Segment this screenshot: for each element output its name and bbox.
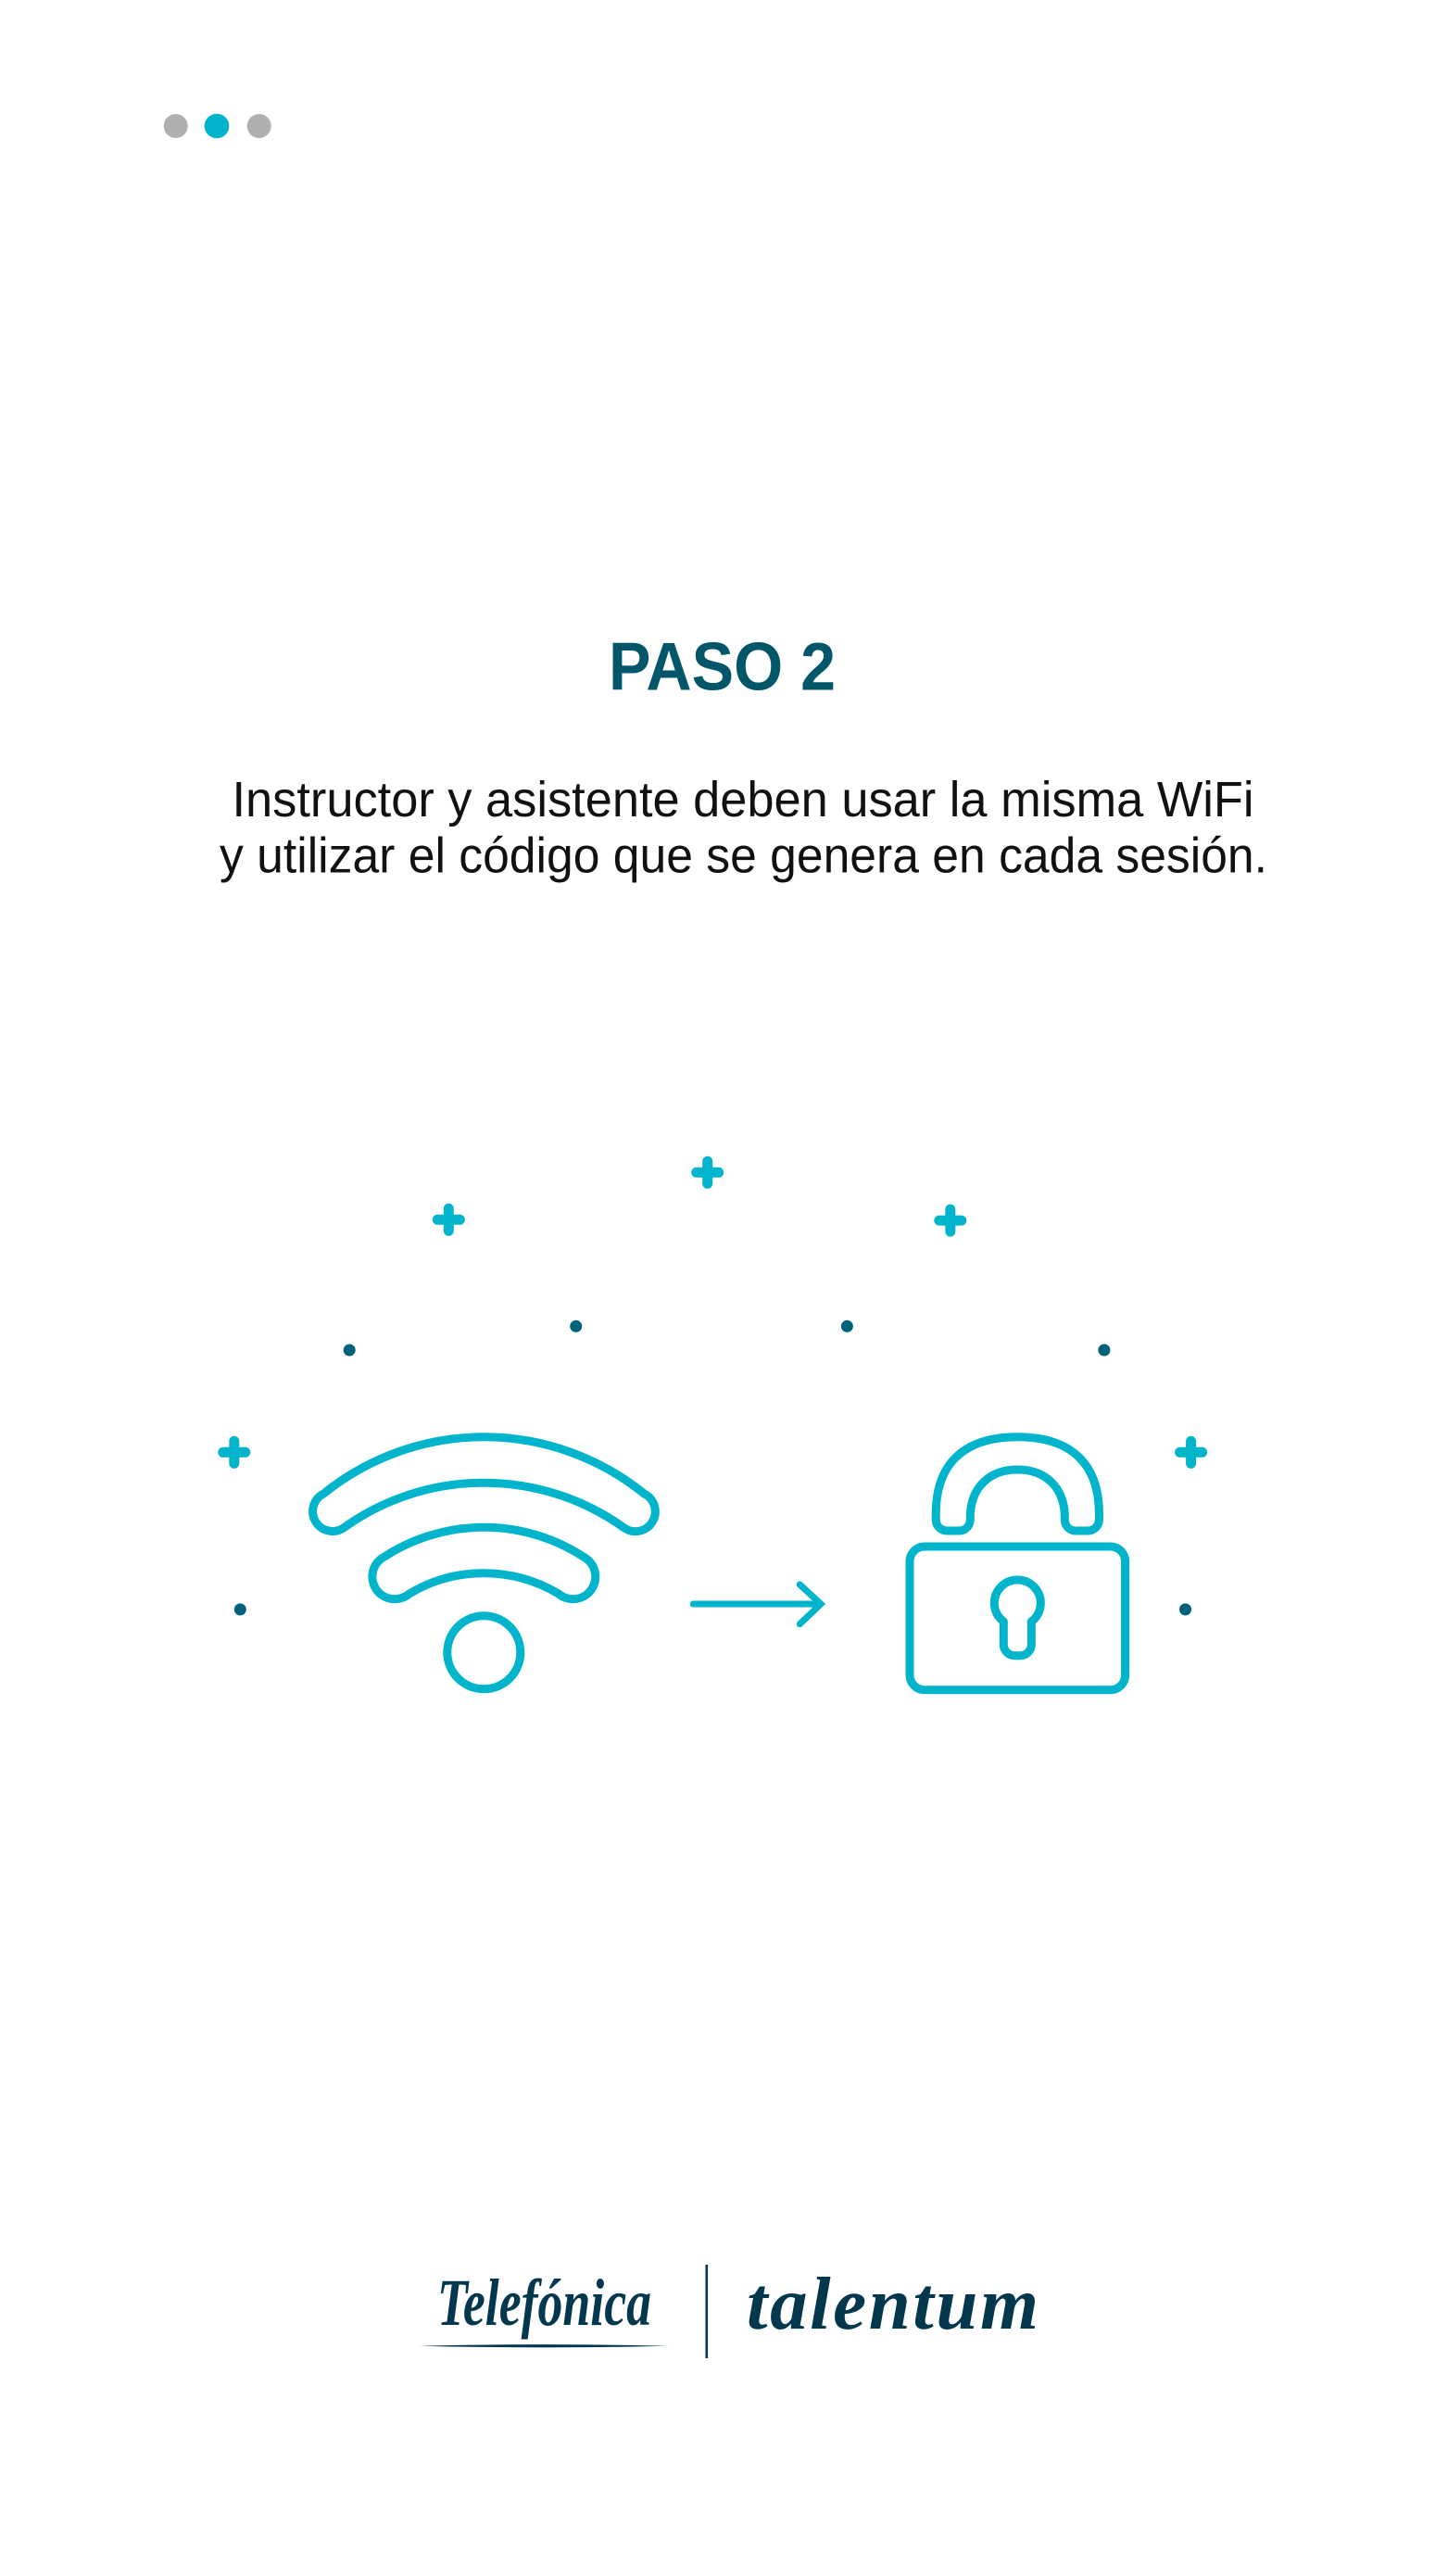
instruction text: Instructor y asistente deben usar la misma WiFi (232, 773, 1254, 827)
step progress indicator dots (164, 114, 271, 138)
title: PASO 2 (609, 628, 836, 704)
decorative plus signs (223, 1161, 1202, 1463)
logo: Telefónica: Telefónica (437, 2266, 651, 2340)
instruction text (220, 773, 1267, 884)
icon: wifi (313, 1437, 655, 1689)
logo: Telefónica (420, 2266, 668, 2347)
logo: talentum: talentum (747, 2262, 1039, 2345)
decorative dots (234, 1320, 1191, 1615)
arrow (693, 1585, 821, 1624)
logo divider (706, 2265, 708, 2358)
icon: padlock (910, 1437, 1126, 1690)
instruction text: y utilizar el código que se genera en cada sesión. (220, 828, 1267, 884)
